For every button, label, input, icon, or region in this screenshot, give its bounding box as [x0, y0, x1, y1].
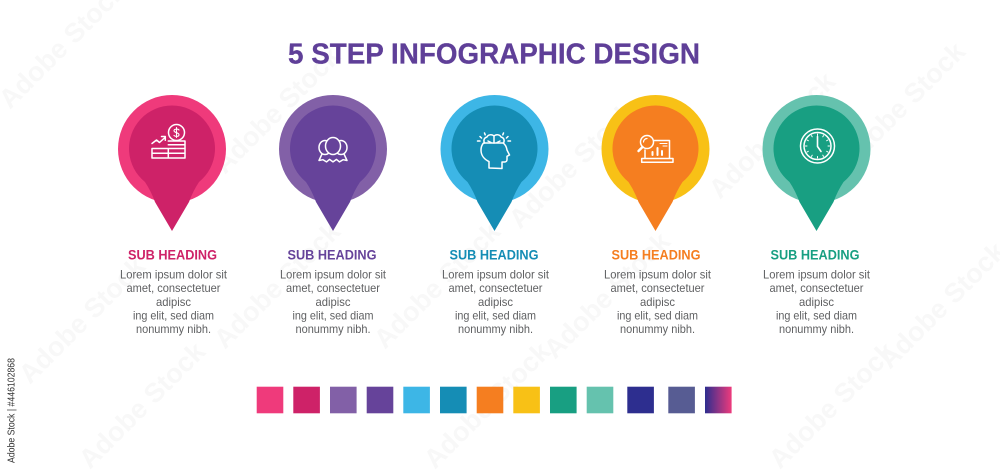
- step 1 text: [120, 248, 228, 336]
- colour palette swatches: [257, 387, 732, 413]
- step 5 text: SUB HEADING: [770, 248, 860, 262]
- step 2 text: nonummy nibh.: [296, 323, 370, 336]
- step 5 text: ing elit, sed diam: [776, 309, 857, 322]
- faint stock watermarks: Adobe Stock: [538, 226, 677, 364]
- pin 4: orange: [602, 95, 710, 231]
- faint stock watermarks: Adobe Stock: [763, 336, 902, 471]
- step 3 text: amet, consectetuer: [448, 282, 543, 295]
- pin 2: purple: [279, 95, 387, 231]
- icon: three figures: [319, 138, 347, 162]
- icon: coins and growth arrow: [152, 124, 185, 158]
- pin 3: blue: [440, 95, 548, 231]
- step 4 text: amet, consectetuer: [610, 282, 705, 295]
- step 1 text: SUB HEADING: [128, 248, 217, 262]
- step 2 text: [280, 248, 387, 336]
- step 5 text: nonummy nibh.: [779, 323, 854, 336]
- step 5 text: Lorem ipsum dolor sit: [763, 268, 871, 282]
- stock image id, vertical side text: Adobe Stock | #446102868: [6, 358, 18, 463]
- faint stock watermarks: Adobe Stock: [503, 96, 642, 234]
- step 5 text: adipisc: [799, 296, 834, 309]
- faint stock watermarks: Adobe Stock: [368, 216, 507, 354]
- step 2 text: ing elit, sed diam: [292, 309, 374, 322]
- step 2 text: adipisc: [316, 296, 351, 309]
- faint stock watermarks: Adobe Stock: [13, 251, 152, 389]
- step 3 text: ing elit, sed diam: [455, 309, 536, 322]
- step 2 text: SUB HEADING: [288, 248, 376, 262]
- faint stock watermarks: Adobe Stock: [73, 336, 212, 471]
- faint stock watermarks: Adobe Stock: [208, 216, 347, 354]
- step 5 text: amet, consectetuer: [770, 282, 864, 295]
- step 4 text: adipisc: [640, 296, 675, 309]
- step 1 text: nonummy nibh.: [136, 323, 211, 336]
- faint stock watermarks: Adobe Stock: [418, 336, 557, 471]
- icon: head with brain: [478, 133, 510, 168]
- step 2 text: amet, consectetuer: [286, 282, 380, 295]
- pin 1: pink: [118, 95, 226, 231]
- step 4 text: [604, 248, 712, 336]
- step 3 text: SUB HEADING: [450, 248, 538, 262]
- step 3 text: Lorem ipsum dolor sit: [442, 268, 550, 282]
- step 3 text: [442, 248, 550, 336]
- step 2 text: Lorem ipsum dolor sit: [280, 268, 387, 282]
- icon: clock: [800, 129, 834, 163]
- step 4 text: nonummy nibh.: [620, 323, 695, 336]
- step 3 text: nonummy nibh.: [458, 323, 533, 336]
- step 1 text: amet, consectetuer: [126, 282, 221, 295]
- title: 5 STEP INFOGRAPHIC DESIGN: [288, 38, 700, 70]
- icon: laptop and magnifier: [638, 136, 673, 162]
- faint stock watermarks: Adobe Stock: [833, 36, 972, 174]
- step 4 text: ing elit, sed diam: [617, 309, 698, 322]
- faint stock watermarks: Adobe Stock: [208, 41, 347, 179]
- step 1 text: ing elit, sed diam: [133, 309, 214, 322]
- step 4 text: SUB HEADING: [612, 248, 700, 262]
- step 4 text: Lorem ipsum dolor sit: [604, 268, 712, 282]
- faint stock watermarks: Adobe Stock: [703, 66, 842, 204]
- step 3 text: adipisc: [478, 296, 513, 309]
- step 1 text: Lorem ipsum dolor sit: [120, 268, 228, 282]
- step 5 text: [763, 248, 871, 336]
- pin 5: teal: [762, 95, 870, 231]
- step 1 text: adipisc: [156, 296, 191, 309]
